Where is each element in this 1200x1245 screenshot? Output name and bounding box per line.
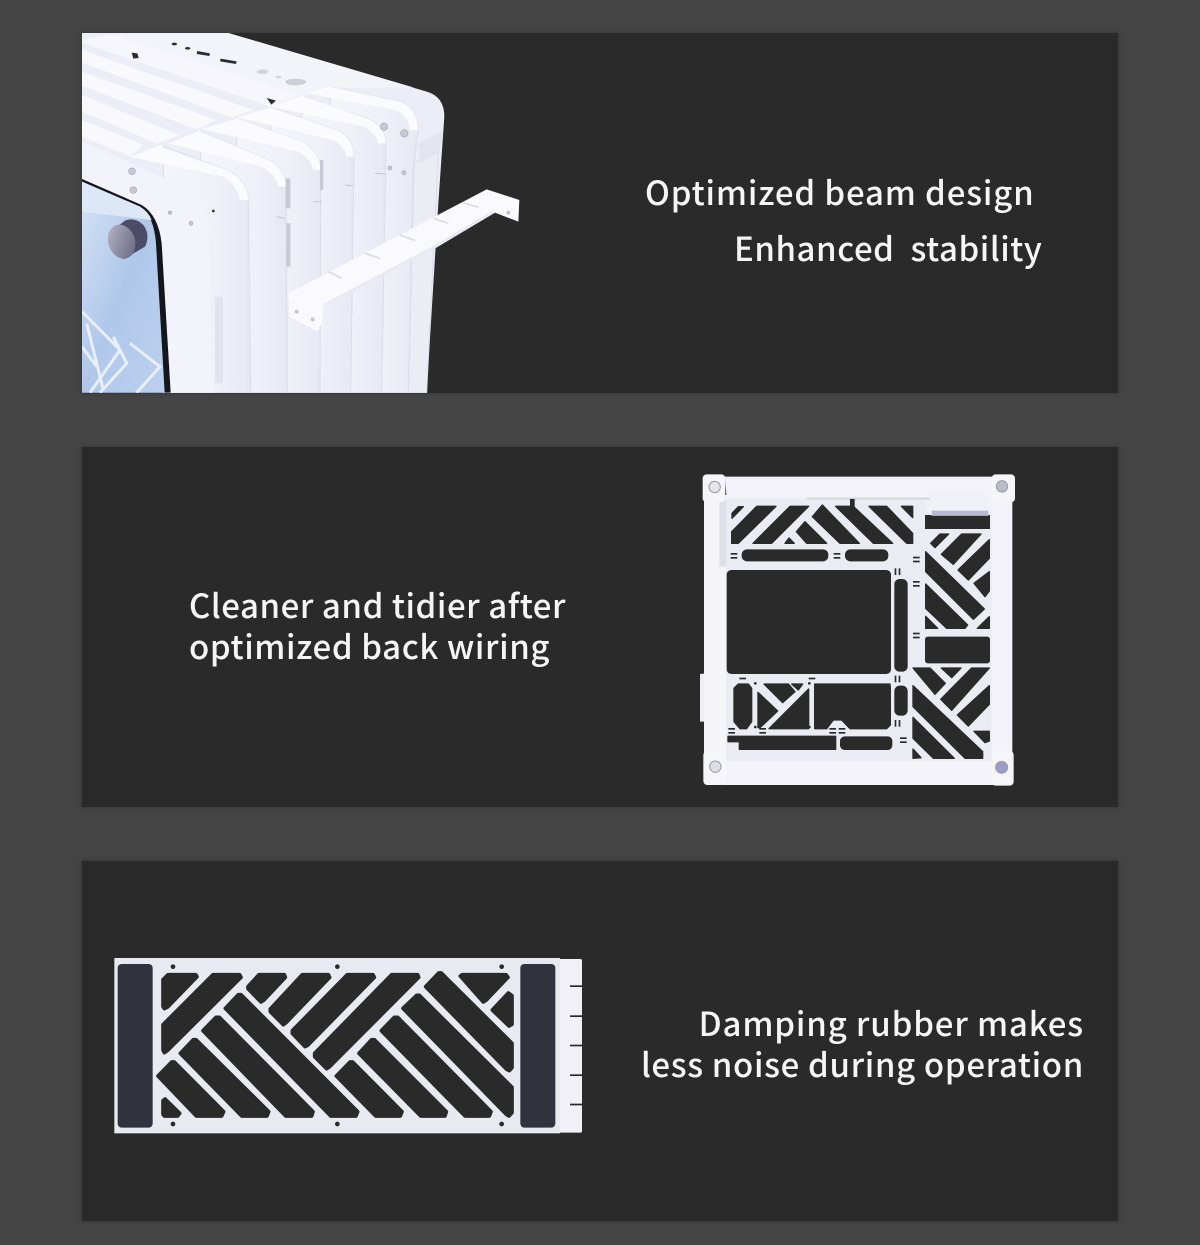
inner plate	[720, 495, 993, 762]
cable tie slots	[728, 553, 920, 743]
image: case rear plate	[700, 474, 1015, 786]
glass side panel	[82, 179, 171, 393]
beam	[288, 189, 519, 332]
panel: beam design	[82, 33, 1118, 393]
thumbscrew	[108, 219, 147, 259]
frame beams	[725, 477, 993, 498]
fin notches	[277, 173, 385, 218]
top cables	[807, 498, 930, 500]
text: beam design line 2: Enhanced stability	[734, 223, 1042, 271]
text: beam design line 1: Optimized beam design	[645, 167, 1035, 215]
top slats	[228, 33, 414, 88]
image: rubber-damped fan bracket	[114, 958, 582, 1133]
ports	[132, 43, 276, 105]
herringbone holes	[158, 973, 512, 1116]
side bracket	[700, 672, 716, 722]
text: back wiring: Cleaner and tidier after optimized back wiring	[189, 580, 566, 669]
corner blocks	[703, 474, 1015, 786]
screws	[129, 123, 408, 225]
fins	[163, 87, 438, 393]
rear corner block	[420, 130, 442, 160]
plate	[114, 958, 560, 1133]
image: white case with beam	[82, 33, 519, 393]
case body	[82, 33, 444, 393]
panel: back wiring	[82, 447, 1118, 807]
text: damping rubber: Damping rubber makes less noise during operation	[641, 998, 1084, 1087]
fin gaps	[215, 160, 323, 383]
holes	[728, 505, 989, 758]
corner screws	[709, 481, 1008, 773]
mounting tab	[555, 959, 582, 1133]
drive bracket	[925, 492, 993, 516]
panel: damping rubber	[82, 861, 1118, 1221]
glass mesh reflection	[82, 312, 160, 393]
fin top highlights	[130, 87, 418, 200]
screw holes	[171, 964, 504, 1126]
damping rubber strips	[118, 964, 153, 1128]
